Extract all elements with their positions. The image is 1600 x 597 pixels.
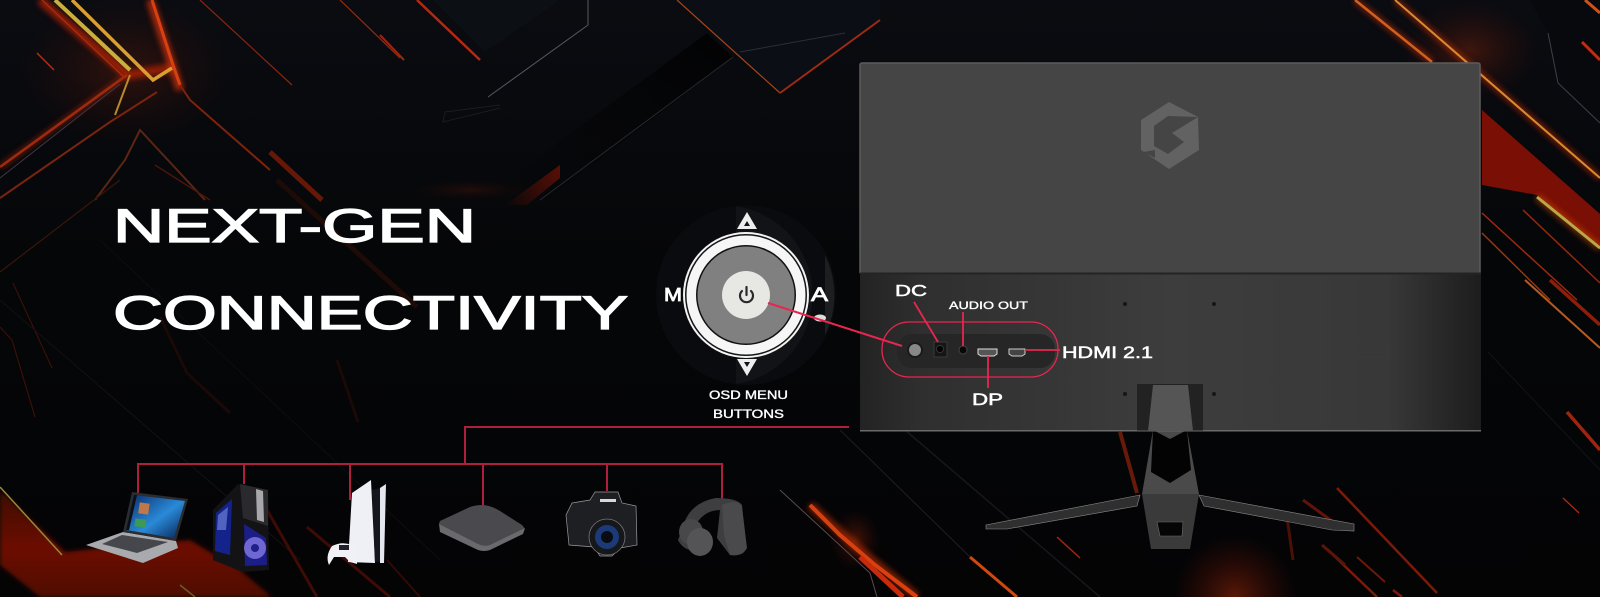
DP port (978, 349, 997, 356)
callout connector lines (768, 302, 1060, 388)
HDMI leader (1025, 349, 1060, 351)
power button (907, 342, 923, 358)
port labels (895, 283, 1153, 409)
monitor chin (860, 274, 1481, 431)
bottom-left accents (0, 487, 62, 555)
port recess (897, 334, 1055, 368)
title (113, 199, 628, 339)
OSD joystick close-up (656, 205, 836, 385)
bottom-right (1337, 488, 1437, 593)
left faint lines (0, 180, 120, 272)
OSD direction marks (664, 212, 828, 376)
right red panel (1482, 110, 1600, 250)
top-center (417, 0, 480, 60)
icon: laptop (86, 492, 188, 563)
port labels: DC (895, 283, 927, 300)
DC jack (934, 342, 947, 357)
device connection tree (138, 427, 849, 505)
OSD direction marks: A (811, 285, 828, 306)
ports outline (882, 322, 1058, 377)
HDMI port (1009, 349, 1025, 356)
right side (1355, 0, 1432, 62)
port labels: AUDIO OUT (949, 300, 1028, 312)
icon: game console and controller (328, 480, 386, 565)
icon: external SSD (439, 505, 525, 551)
screw holes (1123, 302, 1216, 396)
stand mount (1137, 384, 1203, 431)
icon: desktop PC tower (213, 484, 269, 572)
title line 2: CONNECTIVITY (113, 286, 628, 339)
vent slot (1343, 344, 1390, 357)
bottom-left red panel (0, 490, 272, 597)
monitor back panel (860, 63, 1480, 274)
audio leader (962, 312, 964, 346)
icon: power symbol (740, 287, 753, 302)
OSD label (709, 390, 788, 421)
bottom-center flame (810, 505, 917, 597)
icon: headphones (678, 498, 747, 556)
icon: brand logo (1141, 102, 1199, 169)
top-left circuit (55, 0, 130, 70)
icon: DSLR camera (566, 492, 637, 556)
OSD leader (768, 303, 902, 346)
title line 1: NEXT-GEN (113, 199, 476, 252)
port labels: DP (972, 391, 1003, 409)
OSD label: BUTTONS (713, 409, 784, 421)
audio jack (959, 346, 967, 354)
OSD direction marks: M (664, 285, 682, 305)
DP leader (987, 356, 989, 388)
DC leader (914, 302, 938, 342)
monitor stand (986, 430, 1354, 549)
OSD label: OSD MENU (709, 390, 788, 402)
port labels: HDMI 2.1 (1062, 344, 1153, 362)
monitor rear (860, 63, 1481, 549)
